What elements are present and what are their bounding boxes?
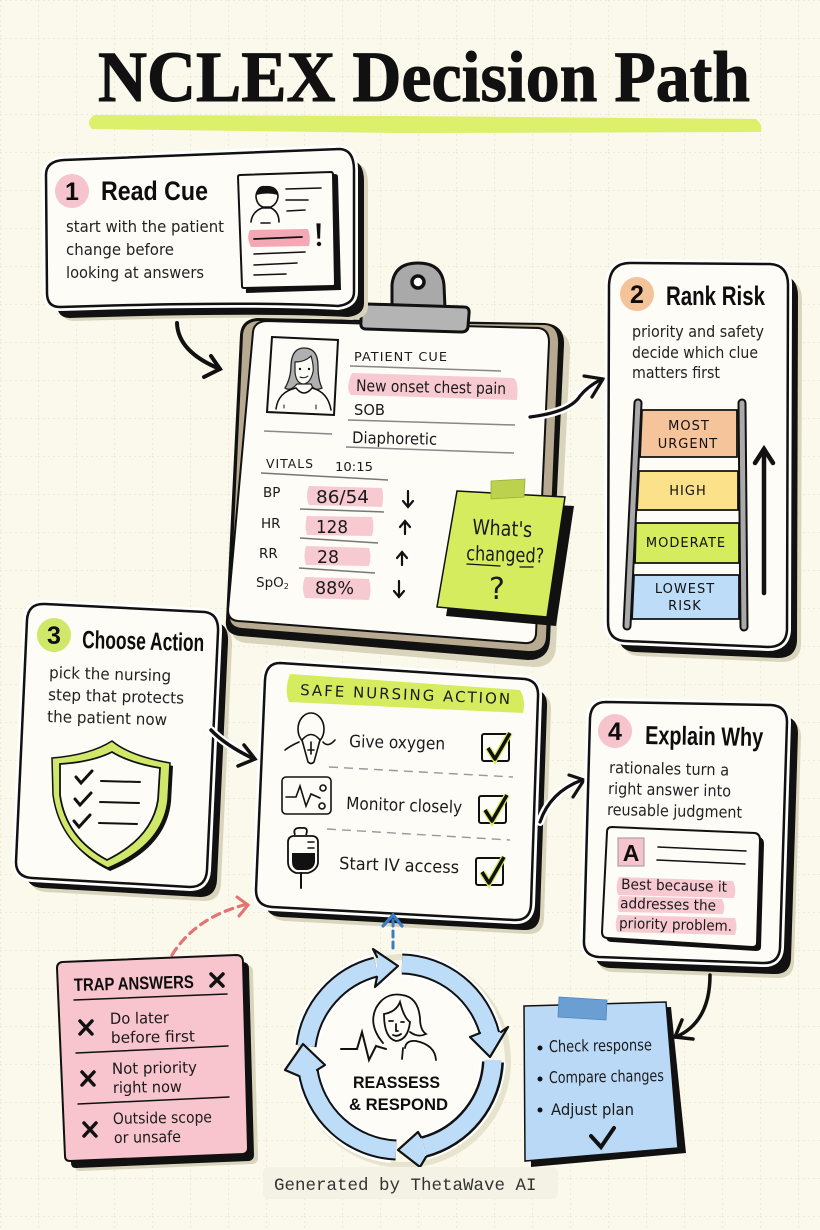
description: looking at answers [66, 263, 204, 282]
trap: do later: Do later [110, 1009, 170, 1028]
vitals time: 10:15 [335, 459, 373, 474]
panel: choose action [16, 604, 232, 901]
rung: moderate: MODERATE [646, 536, 726, 551]
vital rows: 88% [315, 578, 354, 599]
trap: not priority: Not priority [112, 1059, 197, 1078]
vital rows [256, 485, 369, 599]
step badge 4: 4 [608, 718, 622, 746]
checklist: Adjust plan [551, 1100, 634, 1119]
arrow: increasing priority [755, 449, 773, 593]
arrow: clipboard to rank risk [530, 376, 603, 417]
heading: TRAP ANSWERS [74, 972, 194, 995]
rationale text [619, 877, 732, 935]
trap: do later: before first [111, 1028, 195, 1047]
arrow: safe action to explain why [540, 775, 584, 822]
rung: high [637, 471, 738, 510]
rung: lowest risk: RISK [668, 599, 702, 614]
row: monitor closely [282, 777, 507, 823]
step badge 3 [37, 618, 71, 652]
checklist: Check response [549, 1035, 652, 1056]
patient cue list [264, 349, 518, 453]
trap: do later [80, 1009, 195, 1047]
description: priority and safety [632, 322, 764, 341]
checkbox [476, 857, 504, 885]
checkbox [479, 795, 507, 823]
rationale text: Best because it [621, 877, 728, 896]
icon: oxygen mask [285, 713, 335, 764]
icon: IV bag [288, 828, 318, 888]
description: the patient now [47, 707, 167, 729]
answer letter A: A [623, 840, 639, 866]
step badge 2 [620, 277, 654, 311]
vital rows: 2 [284, 582, 289, 591]
rung: high: HIGH [669, 484, 707, 499]
arrow: trap dashed to safe action [172, 897, 248, 955]
trap: outside scope: or unsafe [114, 1128, 181, 1147]
vital rows: SpO [256, 575, 284, 591]
rationale text: priority problem. [619, 916, 732, 935]
icon: check mark [591, 1128, 614, 1147]
checkbox [482, 733, 510, 761]
icon: patient chart [238, 172, 341, 293]
tape [491, 479, 525, 499]
label: Start IV access [339, 854, 460, 878]
trap: outside scope: Outside scope [113, 1108, 212, 1128]
arrow: choose action to safe actions [211, 730, 255, 766]
arrow: reassess dashed to safe action [383, 915, 402, 948]
card frame [584, 702, 801, 978]
icon: pulse line [341, 1032, 386, 1060]
arc arrows [306, 964, 493, 1150]
icon: shield checklist [52, 741, 173, 871]
description [632, 322, 764, 382]
vital rows: HR [261, 516, 281, 532]
sticky note: what's changed: changed? [466, 541, 545, 568]
reassess and respond cycle [285, 949, 508, 1167]
cycle inner fill [312, 969, 488, 1145]
footer credit [263, 1167, 558, 1199]
step badge 1: 1 [65, 178, 79, 206]
checklist [538, 1035, 664, 1119]
description: start with the patient [66, 217, 224, 236]
cue: chest pain: New onset chest pain [356, 376, 506, 398]
description: matters first [632, 363, 720, 382]
heading: Read Cue [101, 176, 208, 206]
checklist: Compare changes [549, 1066, 664, 1087]
vital rows: 86/54 [316, 487, 369, 508]
patient portrait [267, 337, 338, 415]
answer letter A [618, 838, 644, 866]
description: reusable judgment [607, 800, 742, 822]
clipboard board [226, 318, 570, 667]
icon: cardiac monitor [282, 777, 331, 814]
heading: SAFE NURSING ACTION [300, 681, 512, 708]
priority ladder [627, 403, 744, 627]
highlight: chest pain [348, 373, 518, 400]
rung: moderate [635, 523, 739, 563]
card frame [46, 149, 368, 321]
step badge 4 [598, 714, 632, 748]
cycle label: & RESPOND [349, 1095, 448, 1114]
icon: heading x [211, 974, 223, 986]
row: give oxygen [285, 713, 510, 764]
arrow heads [285, 949, 508, 1167]
rationale highlight [616, 877, 736, 935]
step badge 2: 2 [630, 281, 644, 309]
description [47, 663, 184, 729]
rails [627, 403, 638, 626]
arrow: read cue to clipboard [177, 323, 220, 377]
description: step that protects [48, 685, 184, 708]
sticky note: reassess checklist [524, 997, 686, 1167]
trend arrows [394, 491, 413, 597]
label: Monitor closely [346, 794, 462, 818]
tape [558, 997, 607, 1020]
vitals heading: VITALS [266, 456, 314, 471]
step badge 1 [55, 174, 89, 208]
trap: not priority [82, 1059, 197, 1097]
title text: NCLEX Decision Path [98, 37, 750, 117]
patient cue heading: PATIENT CUE [354, 349, 448, 364]
card frame [16, 604, 232, 901]
footer credit: Generated by ThetaWave AI [274, 1176, 537, 1196]
trap: not priority: right now [113, 1078, 182, 1097]
vitals table [256, 456, 413, 600]
sticky note: what's changed: ? [489, 572, 505, 607]
nurse portrait [373, 995, 436, 1060]
heading highlight [287, 674, 524, 713]
rung: most urgent [640, 410, 737, 457]
panel: rank risk [608, 263, 802, 662]
trap: outside scope [84, 1108, 212, 1147]
note text: What's [472, 515, 533, 542]
clip [361, 263, 469, 332]
title [89, 37, 761, 133]
rationale text: addresses the [620, 896, 716, 915]
cue: diaphoretic: Diaphoretic [352, 428, 437, 449]
panel: safe nursing action [256, 663, 551, 934]
sticky note: what's changed [437, 479, 574, 626]
description: rationales turn a [609, 758, 729, 780]
row: start IV access [288, 828, 504, 888]
panel: trap answers [57, 955, 258, 1171]
rung: most urgent: URGENT [658, 437, 718, 452]
title highlight stroke [89, 115, 761, 133]
panel: read cue [46, 149, 368, 321]
vital rows: 128 [316, 517, 348, 538]
cue: SOB: SOB [354, 401, 385, 419]
description [66, 217, 224, 282]
cycle label [349, 1073, 448, 1114]
heading: Rank Risk [666, 281, 766, 311]
cycle label: REASSESS [353, 1073, 440, 1092]
card frame [608, 263, 802, 662]
heading: Choose Action [82, 626, 205, 657]
vital rows: RR [259, 546, 278, 562]
rung: lowest risk [632, 575, 739, 619]
answer card [602, 827, 764, 951]
step badge 3: 3 [47, 622, 61, 650]
panel: explain why [584, 702, 801, 978]
vital rows: BP [263, 485, 280, 501]
description: pick the nursing [49, 663, 171, 685]
rung: most urgent: MOST [668, 419, 710, 434]
label: Give oxygen [349, 732, 445, 755]
card frame [256, 663, 551, 934]
description [607, 758, 742, 822]
cycle soft shadow [300, 957, 508, 1165]
arrow: explain why to reassess note [675, 975, 710, 1039]
heading: Explain Why [645, 720, 764, 752]
vital pills [303, 486, 383, 600]
clipboard [226, 263, 574, 667]
rung: lowest risk: LOWEST [655, 582, 715, 597]
description: right answer into [608, 779, 731, 801]
vital rows: 28 [317, 547, 339, 568]
description: decide which clue [632, 343, 758, 362]
description: change before [66, 240, 174, 259]
